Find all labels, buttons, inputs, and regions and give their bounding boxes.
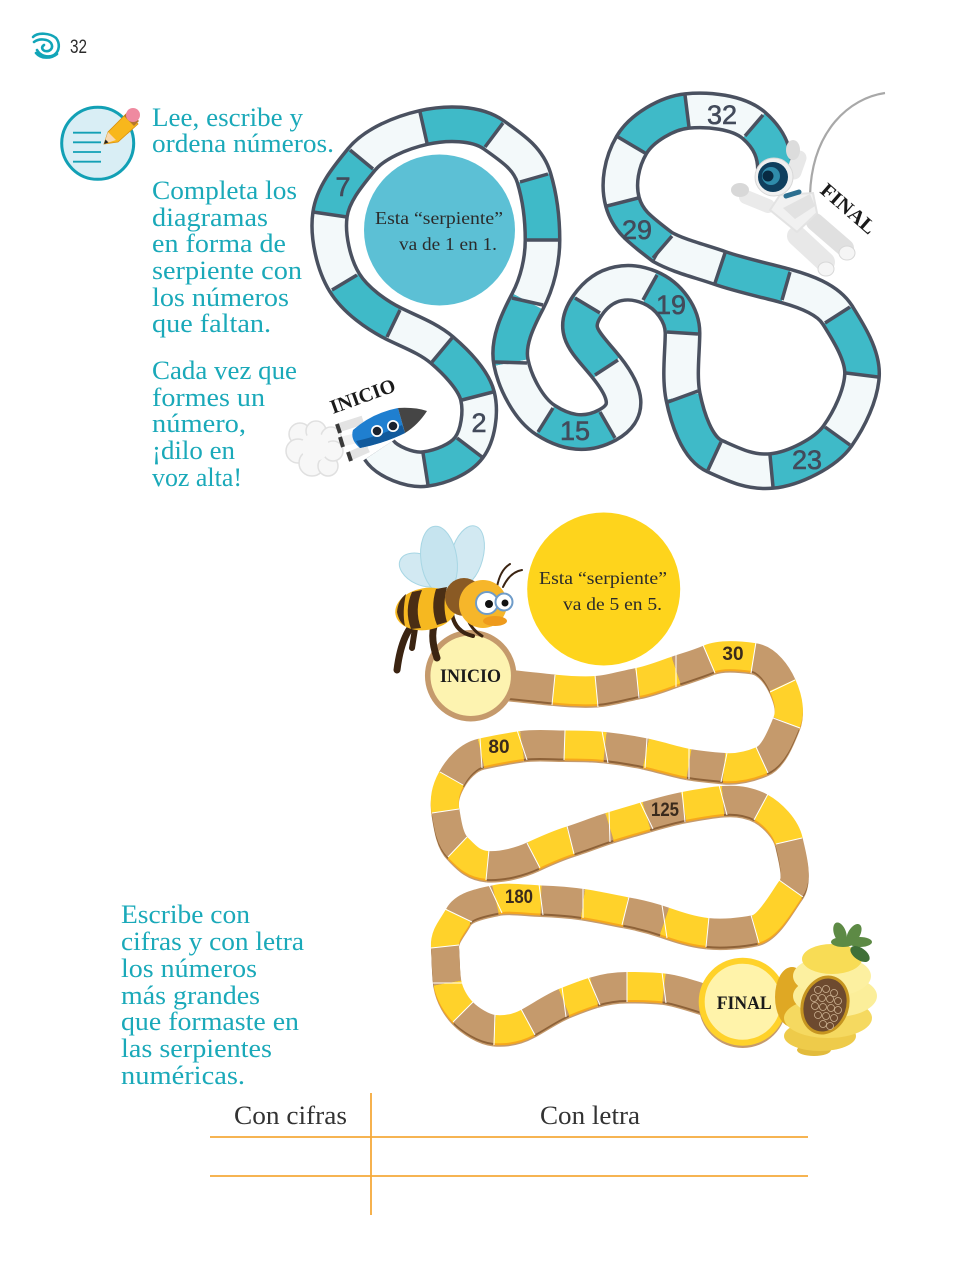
text block: instructions: voz alta! <box>152 463 242 492</box>
text block: write the largest numbers: más grandes <box>121 981 260 1010</box>
snake numbers: 2 <box>471 408 487 438</box>
icon: tether <box>810 93 885 195</box>
icon: pencil and notes <box>62 107 140 179</box>
text block: instructions: número, <box>152 409 246 438</box>
text block: instructions: ordena números. <box>152 129 334 158</box>
snake numbers <box>488 644 744 908</box>
text block: instructions: serpiente con <box>152 256 302 285</box>
callout: counts by ones: Esta “serpiente” <box>375 208 503 228</box>
text block: write the largest numbers: cifras y con letra <box>121 927 304 956</box>
text block: instructions: Cada vez que <box>152 356 297 385</box>
text block: instructions: ¡dilo en <box>152 436 235 465</box>
snake numbers: 32 <box>707 100 737 130</box>
text block: instructions: formes un <box>152 383 265 412</box>
icon: smoke cloud <box>286 421 343 476</box>
text block: write the largest numbers: que formaste en <box>121 1007 299 1036</box>
snake numbers: 15 <box>560 416 590 446</box>
text block: write the largest numbers: las serpientes <box>121 1034 272 1063</box>
start node: INICIO <box>428 633 514 719</box>
snake numbers: 23 <box>792 445 822 475</box>
icon: spiral page marker <box>33 34 59 58</box>
chart: yellow number snake <box>431 642 803 1045</box>
end node: FINAL: FINAL <box>717 993 772 1014</box>
snake outline <box>329 110 862 471</box>
icon: beehive <box>775 921 877 1056</box>
text block: instructions: Completa los <box>152 176 297 205</box>
label: FINAL astronaut: FINAL <box>816 179 880 239</box>
callout: counts by fives <box>527 512 680 666</box>
start node: INICIO: INICIO <box>440 666 501 687</box>
column heading: con cifras: Con cifras <box>234 1101 347 1130</box>
end node: FINAL <box>699 960 787 1048</box>
column heading: con letra: Con letra <box>540 1101 640 1130</box>
callout: counts by fives: va de 5 en 5. <box>563 594 662 614</box>
snake cells <box>329 110 862 471</box>
table: answers <box>210 1093 808 1215</box>
snake numbers: 19 <box>656 290 686 320</box>
text block: instructions: los números <box>152 283 289 312</box>
snake numbers <box>335 100 822 475</box>
snake numbers: 80 <box>488 737 510 758</box>
callout: counts by fives: Esta “serpiente” <box>539 568 667 588</box>
snake numbers: 7 <box>335 172 351 202</box>
callout: counts by ones <box>364 154 515 306</box>
text block: instructions: que faltan. <box>152 309 271 338</box>
label: INICIO rocket: INICIO <box>327 375 399 419</box>
text block: instructions: en forma de <box>152 229 286 258</box>
text block: write the largest numbers: Escribe con <box>121 900 250 929</box>
snake numbers: 29 <box>622 215 652 245</box>
snake numbers: 125 <box>651 800 679 821</box>
text block: instructions <box>152 103 334 492</box>
text block: write the largest numbers: los números <box>121 954 257 983</box>
icon: bee <box>392 522 522 670</box>
text block: write the largest numbers <box>121 900 304 1090</box>
callout: counts by ones: va de 1 en 1. <box>399 234 497 254</box>
snake numbers: 180 <box>505 887 533 908</box>
text block: instructions: diagramas <box>152 203 268 232</box>
icon: rocket <box>337 408 427 461</box>
snake numbers: 30 <box>722 644 744 665</box>
text block: write the largest numbers: numéricas. <box>121 1061 245 1090</box>
page number: 32 <box>70 37 87 58</box>
chart: blue number snake <box>313 95 878 487</box>
text block: instructions: Lee, escribe y <box>152 103 303 132</box>
icon: astronaut <box>731 140 855 276</box>
